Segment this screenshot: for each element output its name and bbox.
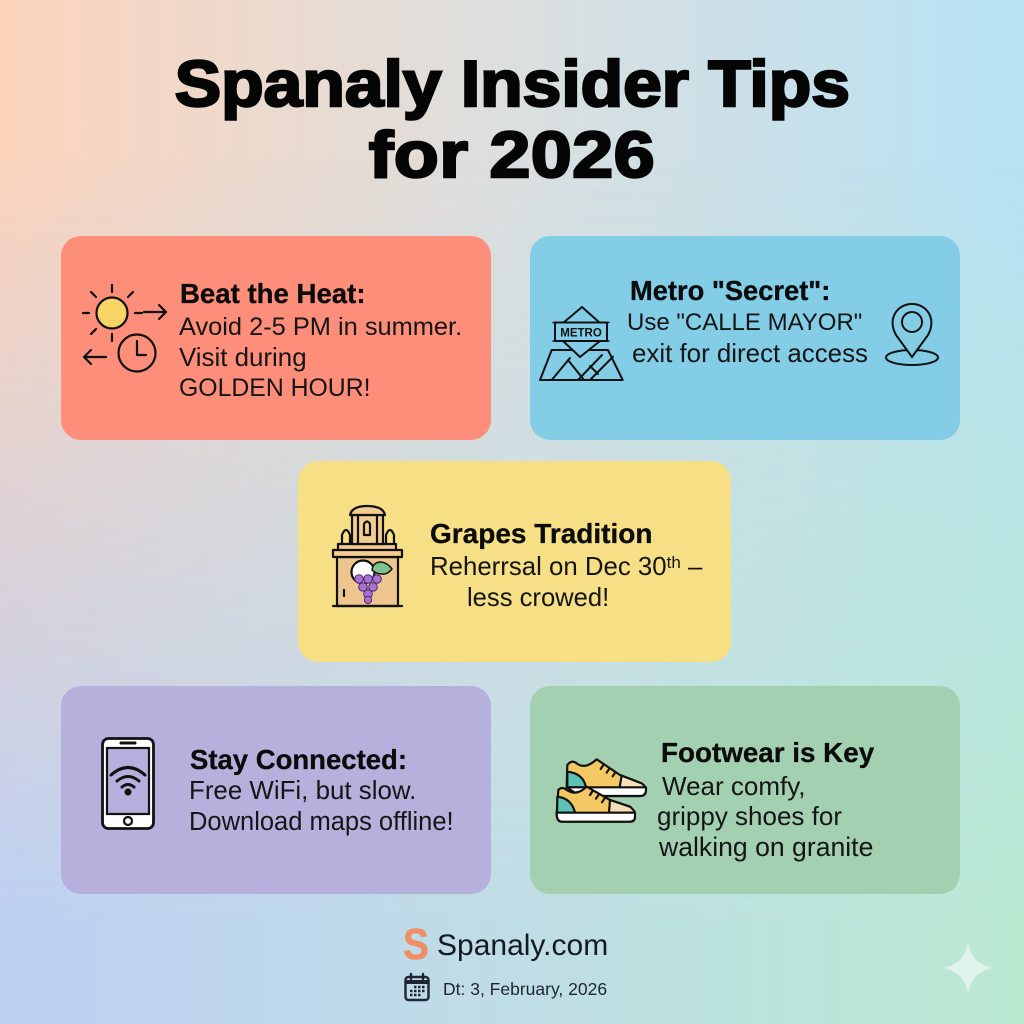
logo: spanaly	[403, 920, 608, 969]
text: metro use: Use "CALLE MAYOR"	[627, 309, 862, 336]
date row	[404, 972, 607, 1002]
icon part: front shoe	[557, 787, 635, 822]
icon: calendar	[404, 972, 430, 1002]
icon: location pin	[885, 303, 939, 366]
heading: beat the heat: Beat the Heat:	[180, 278, 366, 309]
panel: stay connected	[61, 686, 491, 894]
icon: sun and clock	[82, 284, 168, 373]
panel: beat the heat	[61, 236, 491, 440]
text: stay connected	[189, 777, 454, 836]
panel: metro secret	[530, 236, 960, 440]
icon: metro map	[539, 306, 624, 381]
icon: clock tower and grapes	[332, 504, 404, 608]
icon: metro map: METRO	[560, 328, 602, 340]
text: less crowded: less crowed!	[467, 584, 609, 612]
heading: footwear: Footwear is Key	[661, 737, 874, 768]
icon: sparkle	[944, 944, 992, 992]
icon: phone with wifi	[101, 737, 155, 830]
title line one: Spanaly Insider Tips	[175, 47, 850, 120]
panel: footwear	[530, 686, 960, 894]
title	[175, 47, 850, 191]
heading: metro secret: Metro "Secret":	[630, 275, 830, 306]
text: footwear line two: grippy shoes for	[657, 801, 842, 831]
text: footwear line one: Wear comfy,	[662, 771, 806, 801]
text: stay connected: Download maps offline!	[189, 808, 454, 836]
text: metro exit: exit for direct access	[632, 340, 868, 368]
text: beat the heat: GOLDEN HOUR!	[179, 375, 371, 402]
text: stay connected: Free WiFi, but slow.	[189, 777, 416, 805]
icon: S logo: S	[403, 920, 429, 969]
text: beat the heat	[179, 313, 462, 402]
text: footwear line three: walking on granite	[659, 832, 873, 862]
text: date: Dt: 3, February, 2026	[443, 979, 607, 999]
heading: stay connected: Stay Connected:	[190, 744, 407, 775]
text: grapes rehearsal: Reherrsal on Dec 30th –	[430, 553, 702, 581]
panel: grapes tradition	[298, 461, 731, 662]
title line two: for 2026	[369, 118, 655, 191]
heading: grapes tradition: Grapes Tradition	[430, 518, 652, 549]
icon part: back shoe	[567, 759, 646, 796]
text: spanaly.com: Spanaly.com	[437, 929, 608, 962]
text: beat the heat: Visit during	[179, 344, 307, 372]
icon: sneakers	[556, 758, 648, 823]
text: beat the heat: Avoid 2-5 PM in summer.	[179, 313, 462, 341]
